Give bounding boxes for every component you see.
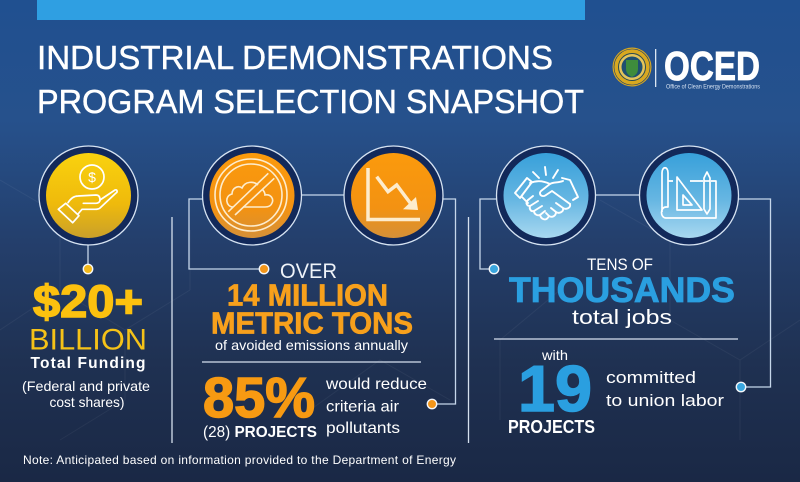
icon: blueprint and tools <box>640 146 738 245</box>
funding stat: (Federal and private <box>22 378 150 394</box>
emissions stat <box>211 260 413 353</box>
top accent bar <box>37 0 585 20</box>
union labor stat <box>508 347 724 437</box>
funding stat: BILLION <box>29 324 147 356</box>
icon: gold hand with coin: $ <box>88 169 96 185</box>
title: PROGRAM SELECTION SNAPSHOT <box>37 84 584 121</box>
85 percent stat: would reduce <box>325 376 427 393</box>
logo: DOE seal and OCED <box>612 43 760 90</box>
connector lines <box>88 195 770 404</box>
85 percent stat: (28) PROJECTS <box>203 424 317 441</box>
title: INDUSTRIAL DEMONSTRATIONS <box>37 40 553 77</box>
jobs stat: total jobs <box>572 306 672 329</box>
funding stat <box>22 276 150 410</box>
emissions stat: METRIC TONS <box>211 306 413 340</box>
emissions stat: OVER <box>280 260 337 283</box>
funding stat: $20+ <box>33 276 143 327</box>
icon: gold hand with coin <box>39 146 138 245</box>
icon: declining chart <box>344 146 443 245</box>
jobs stat <box>509 256 735 329</box>
union labor stat: to union labor <box>606 391 724 410</box>
85 percent stat: criteria air <box>326 398 400 416</box>
jobs stat: TENS OF <box>587 256 653 274</box>
logo: DOE seal and OCED: OCED <box>664 43 760 89</box>
footnote: Note: Anticipated based on information provided to the Department of Energy <box>23 453 456 467</box>
union labor stat: 19 <box>518 352 592 425</box>
emissions stat: of avoided emissions annually <box>215 337 408 353</box>
union labor stat: PROJECTS <box>508 417 595 437</box>
title <box>37 40 584 121</box>
vertical and horizontal dividers <box>172 217 738 443</box>
funding stat: cost shares) <box>50 394 124 410</box>
funding stat: Total Funding <box>30 355 146 372</box>
logo: DOE seal and OCED: Office of Clean Energy Demonstrations <box>666 84 760 90</box>
85 percent stat <box>203 366 427 441</box>
icon: no emissions cloud <box>202 146 302 245</box>
union labor stat: with <box>541 347 568 363</box>
union labor stat: committed <box>606 368 696 387</box>
85 percent stat: 85% <box>203 366 315 430</box>
emissions stat: 14 MILLION <box>227 278 388 312</box>
icon: handshake <box>496 146 596 245</box>
85 percent stat: pollutants <box>326 420 400 437</box>
dots <box>83 264 746 409</box>
jobs stat: THOUSANDS <box>509 271 735 310</box>
